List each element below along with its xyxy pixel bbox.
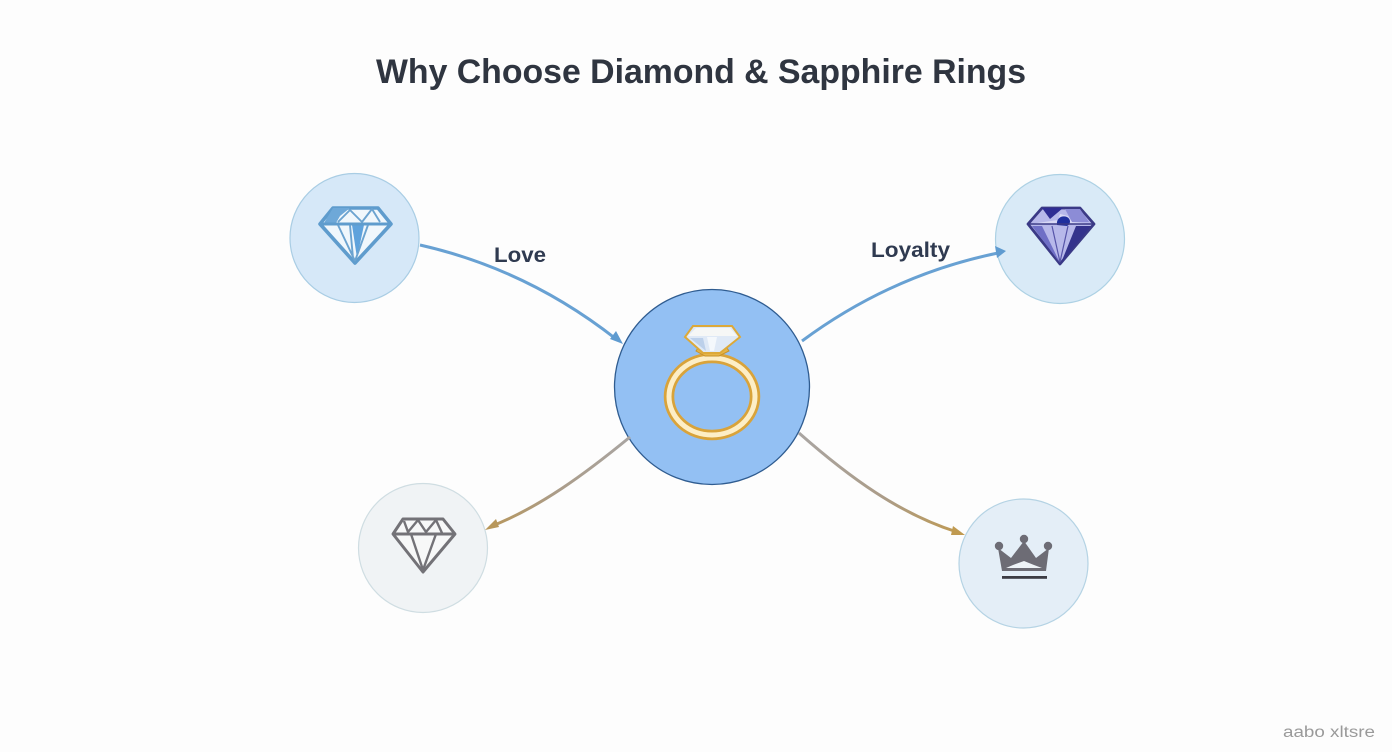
icon: sapphire gem [1028, 208, 1094, 264]
watermark: aabo xltsre [1283, 724, 1375, 741]
node: crown [959, 499, 1088, 628]
node: clear diamond [358, 484, 488, 612]
title: Why Choose Diamond & Sapphire Rings [376, 53, 1026, 91]
node: sapphire [996, 174, 1124, 304]
label: Loyalty: Loyalty [871, 239, 950, 262]
arrow: ring to clear diamond [485, 437, 630, 530]
arrow: diamond to ring, Love [420, 245, 623, 344]
arrow: ring to sapphire, Loyalty [802, 246, 1006, 341]
arrow: ring to crown [799, 433, 965, 535]
icon: gold ring with diamond [669, 326, 755, 435]
node: blue diamond [290, 174, 419, 302]
node: central ring [614, 290, 810, 484]
label: Love: Love [494, 244, 546, 267]
icon: crown [995, 535, 1052, 579]
icon: gray outline diamond [393, 519, 455, 572]
icon: blue diamond [320, 208, 391, 263]
